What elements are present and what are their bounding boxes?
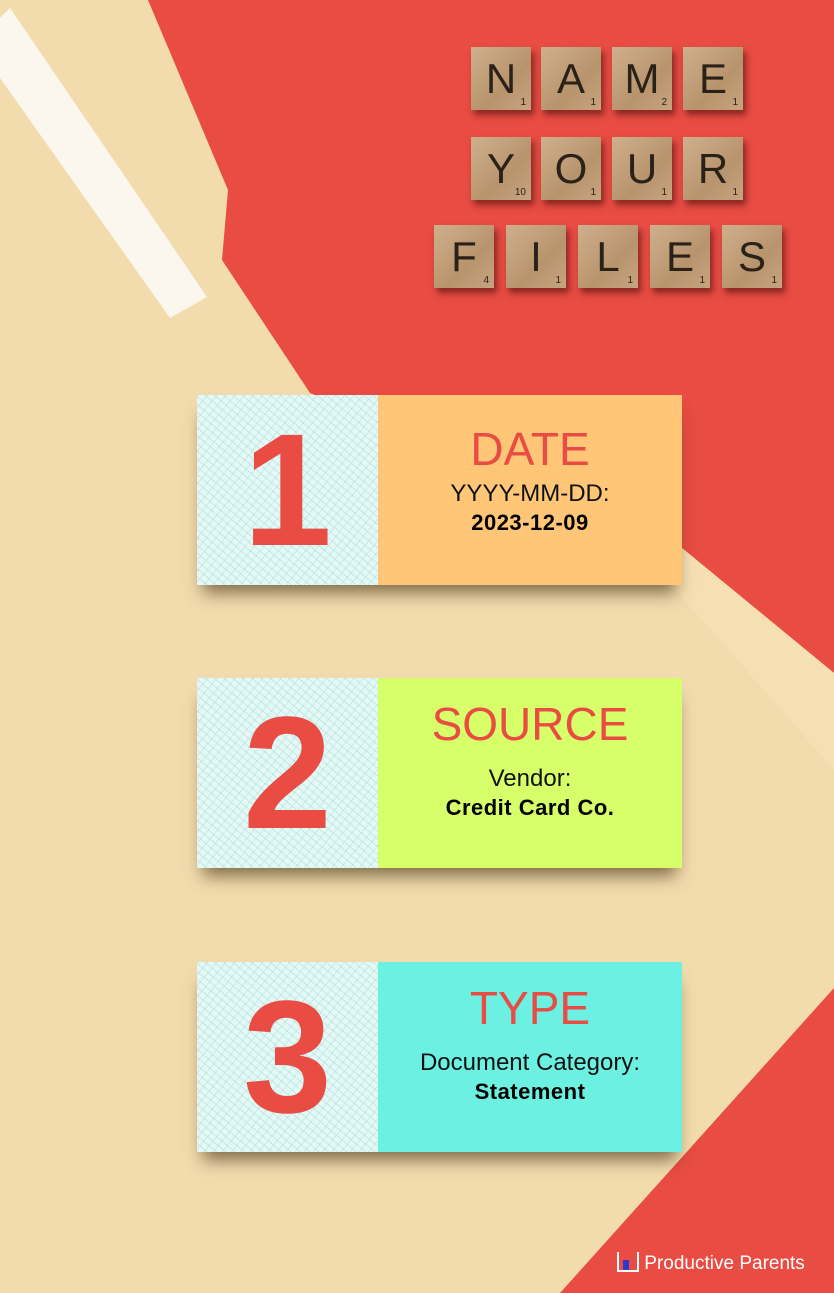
title: scrabble tiles: F xyxy=(451,233,477,280)
card 1: date: YYYY-MM-DD: xyxy=(450,480,610,507)
title: scrabble tiles: 1 xyxy=(555,275,561,286)
title: scrabble tiles: 1 xyxy=(732,187,738,198)
title: scrabble tiles: 2 xyxy=(661,97,667,108)
title: scrabble tiles: 1 xyxy=(661,187,667,198)
title: scrabble tiles: 1 xyxy=(627,275,633,286)
card 2: source: Credit Card Co. xyxy=(446,795,614,820)
card 2: source: Vendor: xyxy=(489,765,571,792)
title: scrabble tiles: O xyxy=(555,145,587,192)
title: scrabble tiles: Y xyxy=(487,145,515,192)
card 1: date: DATE xyxy=(470,423,590,475)
title: scrabble tiles: S xyxy=(738,233,766,280)
title: scrabble tiles xyxy=(432,47,790,298)
card 1: date: 1 xyxy=(243,400,332,579)
title: scrabble tiles: 1 xyxy=(590,97,596,108)
card 1: date: 2023-12-09 xyxy=(471,510,589,535)
card 3: type xyxy=(197,962,682,1152)
title: scrabble tiles: A xyxy=(557,55,585,102)
logo: Productive Parents xyxy=(644,1253,805,1274)
title: scrabble tiles: 1 xyxy=(699,275,705,286)
title: scrabble tiles: N xyxy=(486,55,516,102)
title: scrabble tiles: U xyxy=(627,145,657,192)
card 3: type: Document Category: xyxy=(420,1049,640,1076)
title: scrabble tiles: 1 xyxy=(732,97,738,108)
title: scrabble tiles: R xyxy=(698,145,728,192)
title: scrabble tiles: E xyxy=(666,233,694,280)
title: scrabble tiles: I xyxy=(530,233,542,280)
card 2: source xyxy=(197,678,682,868)
title: scrabble tiles: 1 xyxy=(520,97,526,108)
card 1: date xyxy=(197,395,682,585)
card 3: type: Statement xyxy=(475,1079,585,1104)
card 3: type: TYPE xyxy=(470,982,590,1034)
title: scrabble tiles: 1 xyxy=(771,275,777,286)
card 2: source: SOURCE xyxy=(432,698,628,750)
title: scrabble tiles: L xyxy=(596,233,620,280)
title: scrabble tiles: E xyxy=(699,55,727,102)
title: scrabble tiles: 10 xyxy=(515,187,526,198)
title: scrabble tiles: 1 xyxy=(590,187,596,198)
card 2: source: 2 xyxy=(243,683,332,862)
card 3: type: 3 xyxy=(243,967,332,1146)
title: scrabble tiles: 4 xyxy=(483,275,489,286)
title: scrabble tiles: M xyxy=(624,55,660,102)
